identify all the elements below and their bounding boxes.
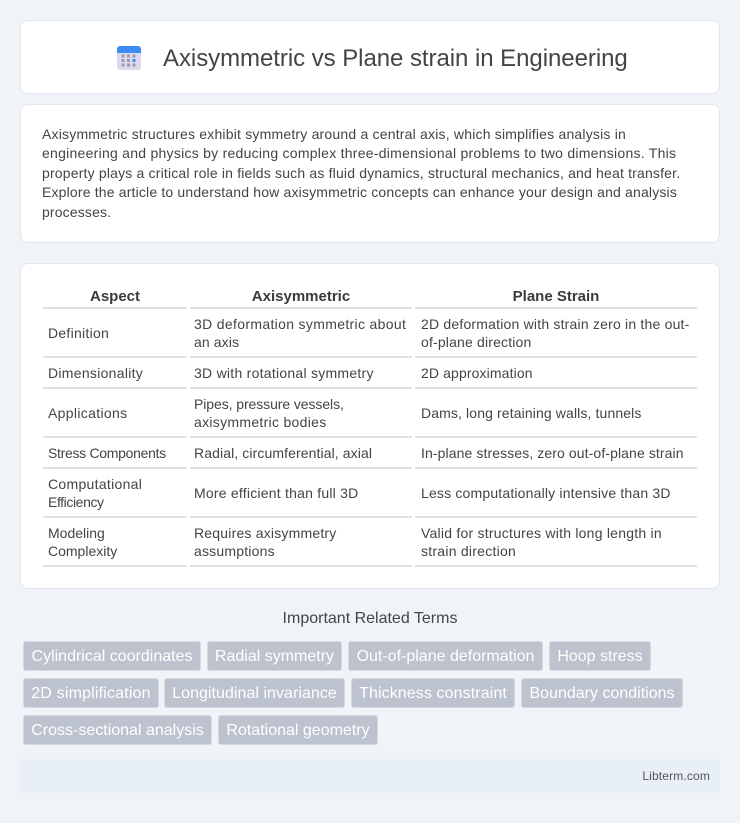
tag — [164, 678, 345, 708]
panel: comparison table: Less computationally intensive than 3D — [421, 485, 671, 501]
tag — [218, 715, 378, 745]
panel: comparison table: 2D approximation — [421, 365, 533, 381]
row: Computational Efficiency — [48, 476, 671, 510]
panel: comparison table: Dams, long retaining walls, tunnels — [421, 405, 642, 421]
panel: comparison table — [20, 263, 720, 589]
panel: comparison table: 3D with rotational symmetry — [194, 365, 374, 381]
tag: Thickness constraint — [359, 685, 507, 702]
panel: comparison table: Dimensionality — [48, 365, 143, 381]
tag — [207, 641, 342, 671]
panel: comparison table: axisymmetric bodies — [194, 414, 327, 430]
intro text — [42, 126, 680, 220]
row: Dimensionality — [48, 365, 533, 381]
tag — [549, 641, 651, 671]
tag: Longitudinal invariance — [172, 685, 337, 702]
panel: comparison table: 2D deformation with strain zero in the out- — [421, 316, 690, 332]
heading: related terms: Important Related Terms — [283, 610, 457, 627]
panel: comparison table: Requires axisymmetry — [194, 525, 336, 541]
panel: comparison table: Computational — [48, 476, 142, 492]
panel: comparison table: 3D deformation symmetric about — [194, 316, 406, 332]
table header: Axisymmetric: Axisymmetric — [252, 288, 350, 305]
tag: Hoop stress — [557, 648, 643, 665]
tag: 2D simplification — [31, 685, 151, 702]
panel: comparison table: of-plane direction — [421, 334, 531, 350]
header panel — [20, 20, 720, 94]
panel: comparison table: In-plane stresses, zero out-of-plane strain — [421, 445, 684, 461]
tag — [23, 715, 212, 745]
text: Axisymmetric structures exhibit symmetry around a central axis, which simplifies analysis in — [42, 126, 626, 142]
tag: Rotational geometry — [226, 722, 370, 739]
tag: Radial symmetry — [215, 648, 334, 665]
title: Axisymmetric vs Plane strain in Engineering — [163, 45, 628, 72]
tag — [348, 641, 543, 671]
tag: Cross-sectional analysis — [31, 722, 204, 739]
panel: introduction — [20, 104, 720, 243]
text: property plays a critical role in fields such as fluid dynamics, structural mechanics, and heat transfer. — [42, 165, 680, 181]
text: processes. — [42, 204, 111, 220]
row: Definition — [48, 316, 690, 350]
table header: Plane Strain: Plane Strain — [513, 288, 599, 305]
panel: comparison table: Definition — [48, 325, 109, 341]
panel: comparison table: Efficiency — [48, 494, 104, 510]
panel: comparison table: Valid for structures with long length in — [421, 525, 662, 541]
panel: comparison table: More efficient than full 3D — [194, 485, 358, 501]
tag — [521, 678, 683, 708]
panel: comparison table: Complexity — [48, 543, 117, 559]
icon: calendar grid — [117, 46, 141, 70]
tag: Out-of-plane deformation — [357, 648, 534, 665]
footer credit: Libterm.com — [642, 769, 710, 783]
text: engineering and physics by reducing complex three-dimensional problems to two dimensions. This — [42, 145, 676, 161]
panel: comparison table: Modeling — [48, 525, 105, 541]
row: Modeling Complexity — [48, 525, 662, 559]
tag — [23, 678, 159, 708]
footer — [20, 759, 720, 793]
panel: comparison table: Applications — [48, 405, 127, 421]
panel: comparison table: assumptions — [194, 543, 275, 559]
tags: related terms — [23, 641, 683, 745]
panel: comparison table: Radial, circumferential, axial — [194, 445, 372, 461]
panel: comparison table: Stress Components — [48, 445, 166, 461]
tag — [23, 641, 201, 671]
panel: comparison table: strain direction — [421, 543, 516, 559]
text: Explore the article to understand how axisymmetric concepts can enhance your design and analysis — [42, 184, 677, 200]
tag — [351, 678, 515, 708]
table header: Aspect: Aspect — [90, 288, 140, 305]
panel: comparison table: Pipes, pressure vessels, — [194, 396, 344, 412]
tag: Boundary conditions — [530, 685, 674, 702]
panel: comparison table: an axis — [194, 334, 239, 350]
row: Applications — [48, 396, 642, 430]
tag: Cylindrical coordinates — [32, 648, 192, 665]
row: Stress Components — [48, 445, 684, 461]
